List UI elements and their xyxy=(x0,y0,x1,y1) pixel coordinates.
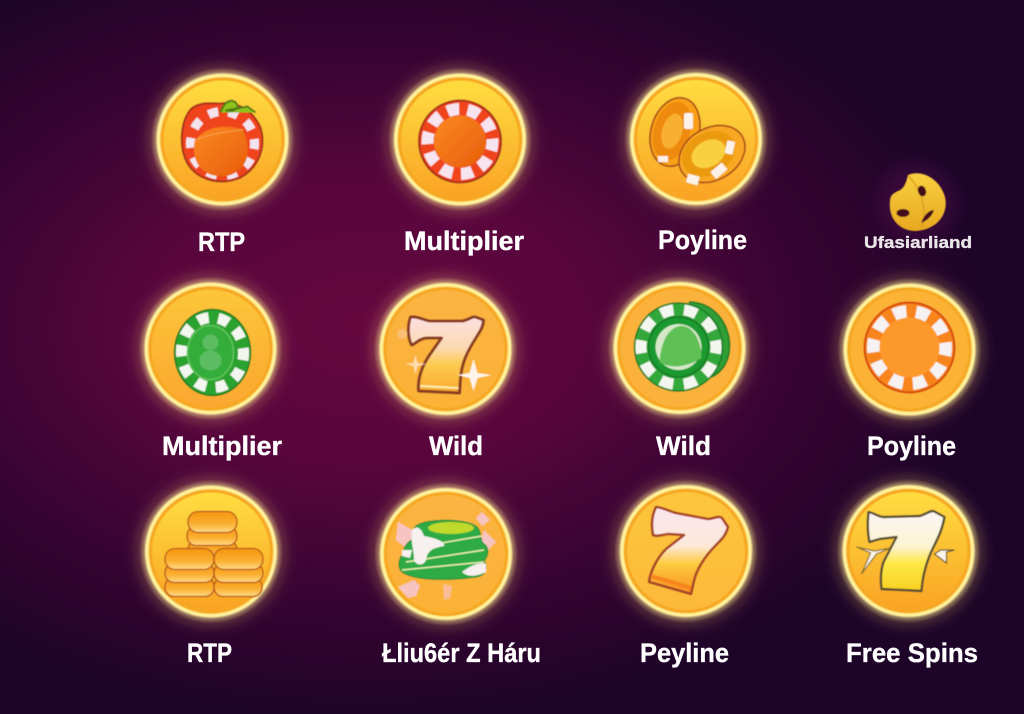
icon: red chip (Multiplier) xyxy=(372,52,548,228)
label: brand name: Ufasiarliand xyxy=(864,233,972,252)
label: RTP: RTP xyxy=(187,638,232,668)
label: Wild: Wild xyxy=(429,431,483,461)
icon: green chip stack (Wild) xyxy=(592,260,768,436)
label: Poyline: Poyline xyxy=(867,431,956,461)
icon: lucky seven with stars (Free Spins) xyxy=(820,463,996,639)
label: Poyline: Poyline xyxy=(658,225,747,255)
icon: green money stack xyxy=(358,466,534,642)
icon: orange chip (Poyline) xyxy=(822,262,998,438)
icon: tomato chip (RTP) xyxy=(134,52,310,228)
label: Peyline: Peyline xyxy=(640,638,729,668)
icon: lucky seven (Peyline) xyxy=(598,463,774,639)
label: Multiplier: Multiplier xyxy=(162,431,282,461)
label: garbled name: Łliu6ér Z Háru xyxy=(382,638,541,668)
label: Free Spins: Free Spins xyxy=(846,638,978,668)
label: Wild: Wild xyxy=(656,431,711,461)
icon: yellow logo blob xyxy=(868,153,968,253)
icon: gold coin stacks (RTP) xyxy=(123,464,299,640)
label: RTP: RTP xyxy=(198,227,245,257)
icon: lucky seven (Wild) xyxy=(358,261,534,437)
icon: green chip with frog (Multiplier) xyxy=(122,260,298,436)
icon: two gold chips (Poyline) xyxy=(608,51,784,227)
label: Multiplier: Multiplier xyxy=(404,226,524,256)
